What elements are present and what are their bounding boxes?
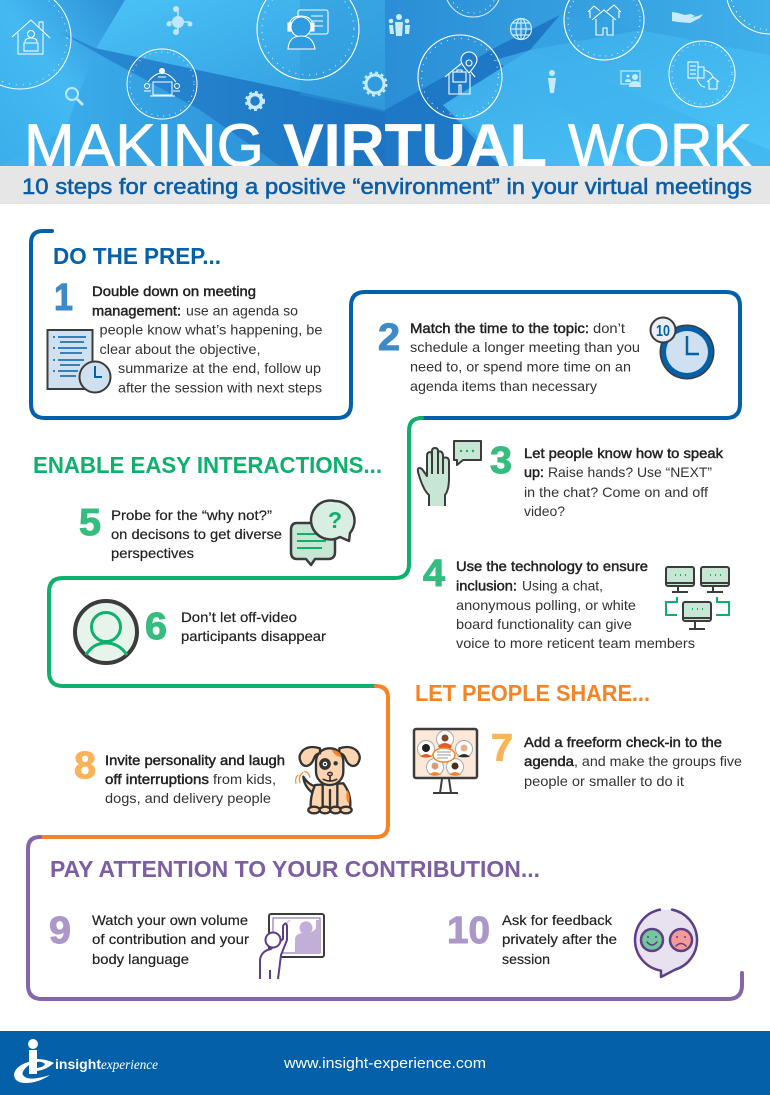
number 3: 3 bbox=[490, 440, 512, 482]
icon: question speech bubbles: ? bbox=[328, 507, 342, 533]
step 2 bbox=[378, 317, 714, 394]
number 6: 6 bbox=[145, 606, 167, 648]
text: step 9: of contribution and your bbox=[92, 931, 249, 947]
website url: www.insight-experience.com bbox=[283, 1055, 486, 1072]
text: step 4: Use the technology to ensure bbox=[456, 558, 648, 574]
step 10 bbox=[447, 910, 697, 977]
text: step 8: Invite personality and laugh bbox=[105, 752, 285, 768]
step 4 bbox=[423, 553, 729, 651]
step 7 bbox=[414, 728, 742, 793]
connector: orange path bbox=[40, 686, 388, 837]
icon: top circle bbox=[445, 0, 501, 17]
text: step 9 bbox=[92, 912, 249, 967]
text: step 2: schedule a longer meeting than you bbox=[410, 339, 640, 355]
footer bbox=[0, 1031, 770, 1095]
text: step 4: voice to more reticent team members bbox=[456, 635, 695, 651]
text: step 1: use an agenda so bbox=[186, 302, 298, 318]
connector: blue path bbox=[31, 231, 740, 418]
icon: three connected monitors bbox=[666, 567, 729, 629]
title bbox=[24, 112, 752, 179]
text: step 4: inclusion: bbox=[456, 578, 517, 594]
heading: let people share: LET PEOPLE SHARE... bbox=[415, 680, 650, 706]
text: step 8 bbox=[105, 752, 285, 806]
text: step 4: anonymous polling, or white bbox=[456, 597, 636, 613]
text: step 3 bbox=[524, 445, 724, 519]
text: step 4 bbox=[456, 558, 695, 651]
text: step 2: don’t bbox=[593, 320, 625, 336]
icon: person at mirror bbox=[260, 914, 324, 979]
number 1: 1 bbox=[54, 277, 73, 319]
text: step 2: agenda items than necessary bbox=[410, 378, 597, 394]
number 10: 10 bbox=[447, 910, 490, 952]
text: step 1: people know what’s happening, be bbox=[100, 322, 323, 338]
icon: open hand bbox=[672, 12, 703, 23]
text: step 9: body language bbox=[92, 951, 189, 967]
icon: team around laptop circle bbox=[127, 49, 197, 119]
icon: home office circle bbox=[0, 0, 71, 89]
text: step 7: Add a freeform check-in to the bbox=[524, 734, 722, 750]
text: step 6: participants disappear bbox=[181, 628, 326, 644]
logo: experience bbox=[101, 1058, 158, 1073]
logo: insight bbox=[55, 1057, 102, 1072]
header banner bbox=[0, 0, 770, 166]
text: step 1: management: bbox=[92, 302, 181, 318]
icon: video call person bbox=[621, 71, 641, 87]
icon: dog bbox=[296, 747, 360, 813]
text: step 5: perspectives bbox=[111, 545, 194, 561]
text: step 2: need to, or spend more time on an bbox=[410, 358, 631, 374]
subtitle bar: 10 steps for creating a positive “environment” in your virtual meetings bbox=[22, 174, 752, 199]
number 8: 8 bbox=[74, 745, 96, 787]
heading: pay attention: PAY ATTENTION TO YOUR CONTRIBUTION... bbox=[50, 856, 540, 882]
text: step 10 bbox=[502, 912, 617, 967]
connector: green path bbox=[49, 418, 422, 686]
icon: right circle bbox=[726, 0, 770, 34]
icon: briefcase home circle bbox=[418, 35, 502, 119]
heading: enable easy interactions: ENABLE EASY INTERACTIONS... bbox=[33, 452, 382, 478]
text: step 10: session bbox=[502, 951, 550, 967]
number 9: 9 bbox=[49, 910, 71, 952]
icon: office to home circle bbox=[669, 41, 735, 107]
icon: group video call monitor bbox=[414, 729, 477, 793]
connector: purple path bbox=[28, 837, 742, 999]
step 9 bbox=[49, 910, 324, 979]
text: step 3: Raise hands? Use “NEXT” bbox=[548, 464, 712, 480]
text: step 6 bbox=[181, 609, 326, 644]
text: step 5: on decisons to get diverse bbox=[111, 526, 282, 542]
text: step 5 bbox=[111, 507, 282, 561]
step 1 bbox=[48, 277, 323, 396]
text: step 1: Double down on meeting bbox=[92, 283, 256, 299]
text: step 8: off interruptions bbox=[105, 771, 209, 787]
text: step 1 bbox=[92, 283, 323, 396]
icon: headset operator circle bbox=[257, 0, 359, 80]
step 8 bbox=[74, 745, 360, 813]
number 7: 7 bbox=[491, 728, 513, 770]
text: step 10: privately after the bbox=[502, 931, 617, 947]
text: step 5: Probe for the “why not?” bbox=[111, 507, 272, 523]
step 3 bbox=[418, 440, 724, 519]
number 5: 5 bbox=[79, 502, 101, 544]
text: step 3: video? bbox=[524, 503, 565, 519]
title: WORK bbox=[568, 112, 752, 179]
icon: small gear bbox=[246, 92, 264, 110]
icon: people group bbox=[389, 14, 410, 36]
text: step 2 bbox=[410, 320, 640, 394]
icon: ten minute clock bbox=[650, 318, 714, 380]
text: step 7: people or smaller to do it bbox=[524, 773, 684, 789]
icon: feedback speech bubble bbox=[635, 910, 697, 977]
text: step 8: from kids, bbox=[213, 771, 276, 787]
text: step 6: Don’t let off-video bbox=[181, 609, 297, 625]
text: step 3: Let people know how to speak bbox=[524, 445, 724, 461]
icon: raised hand with chat bubble bbox=[418, 441, 481, 506]
icon: neighbourhood circle bbox=[564, 0, 644, 60]
icon: magnifier bbox=[66, 88, 83, 105]
heading: do the prep: DO THE PREP... bbox=[53, 243, 221, 269]
text: step 7: agenda bbox=[524, 753, 574, 769]
number 2: 2 bbox=[378, 317, 400, 359]
icon: ten minute clock: 10 bbox=[656, 323, 670, 340]
text: step 1: clear about the objective, bbox=[100, 341, 260, 357]
icon: question speech bubbles bbox=[291, 500, 355, 565]
title: MAKING bbox=[24, 112, 264, 179]
text: step 9: Watch your own volume bbox=[92, 912, 248, 928]
text: step 1: summarize at the end, follow up bbox=[118, 360, 321, 376]
text: step 10: Ask for feedback bbox=[502, 912, 613, 928]
icon: network bbox=[166, 6, 192, 35]
title: VIRTUAL bbox=[283, 112, 547, 179]
step 5 bbox=[79, 500, 355, 565]
number 4: 4 bbox=[423, 553, 445, 595]
text: step 7 bbox=[524, 734, 742, 789]
icon: standing person bbox=[548, 70, 556, 93]
step 6 bbox=[75, 601, 326, 663]
icon: agenda document with clock bbox=[48, 330, 110, 392]
logo bbox=[14, 1039, 158, 1083]
icon: person in circle bbox=[75, 601, 137, 663]
text: step 7: , and make the groups five bbox=[574, 753, 742, 769]
subtitle bar bbox=[0, 166, 770, 204]
icon: globe bbox=[510, 18, 532, 40]
text: step 4: Using a chat, bbox=[522, 578, 603, 594]
icon: large gear bbox=[364, 72, 386, 96]
text: step 1: after the session with next steps bbox=[118, 380, 322, 396]
text: step 2: Match the time to the topic: bbox=[410, 320, 589, 336]
text: step 8: dogs, and delivery people bbox=[105, 790, 271, 806]
text: step 3: up: bbox=[524, 464, 544, 480]
text: step 4: board functionality can give bbox=[456, 616, 632, 632]
text: step 3: in the chat? Come on and off bbox=[524, 484, 708, 500]
